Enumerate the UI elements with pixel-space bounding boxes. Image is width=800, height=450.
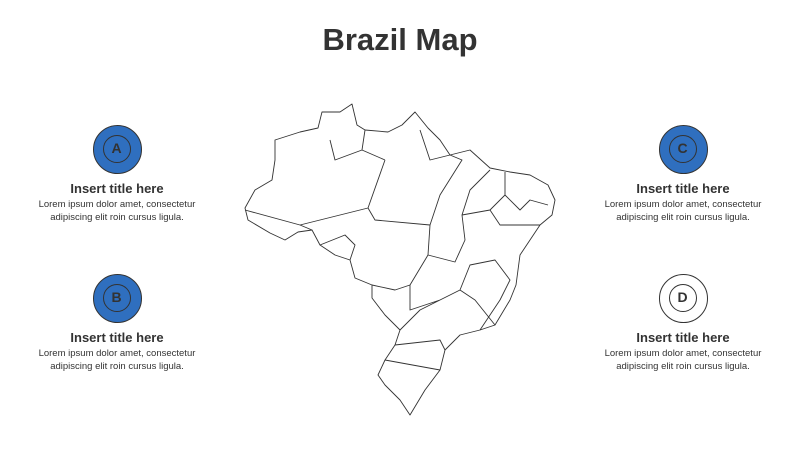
- item D: Insert title here: [636, 330, 730, 345]
- item D: adipiscing elit roin cursus ligula.: [616, 361, 750, 372]
- icon: circle B: B: [111, 289, 122, 305]
- item A: [39, 125, 196, 223]
- item B: [39, 274, 196, 372]
- item C: [605, 125, 762, 223]
- item A: Insert title here: [70, 181, 164, 196]
- item C: adipiscing elit roin cursus ligula.: [616, 212, 750, 223]
- item D: Lorem ipsum dolor amet, consectetur: [605, 348, 761, 359]
- item C: Lorem ipsum dolor amet, consectetur: [605, 199, 761, 210]
- item B: Lorem ipsum dolor amet, consectetur: [39, 348, 195, 359]
- item B: adipiscing elit roin cursus ligula.: [50, 361, 184, 372]
- title: Brazil Map: [322, 22, 478, 57]
- icon: circle A: [92, 125, 142, 174]
- icon: circle D: [658, 274, 708, 323]
- icon: circle A: A: [111, 140, 122, 156]
- icon: circle B: [92, 274, 142, 323]
- icon: circle C: C: [677, 140, 688, 156]
- item A: Lorem ipsum dolor amet, consectetur: [39, 199, 195, 210]
- item C: Insert title here: [636, 181, 730, 196]
- item D: [605, 274, 762, 372]
- icon: circle D: D: [677, 289, 688, 305]
- icon: circle C: [658, 125, 708, 174]
- item B: Insert title here: [70, 330, 164, 345]
- item A: adipiscing elit roin cursus ligula.: [50, 212, 184, 223]
